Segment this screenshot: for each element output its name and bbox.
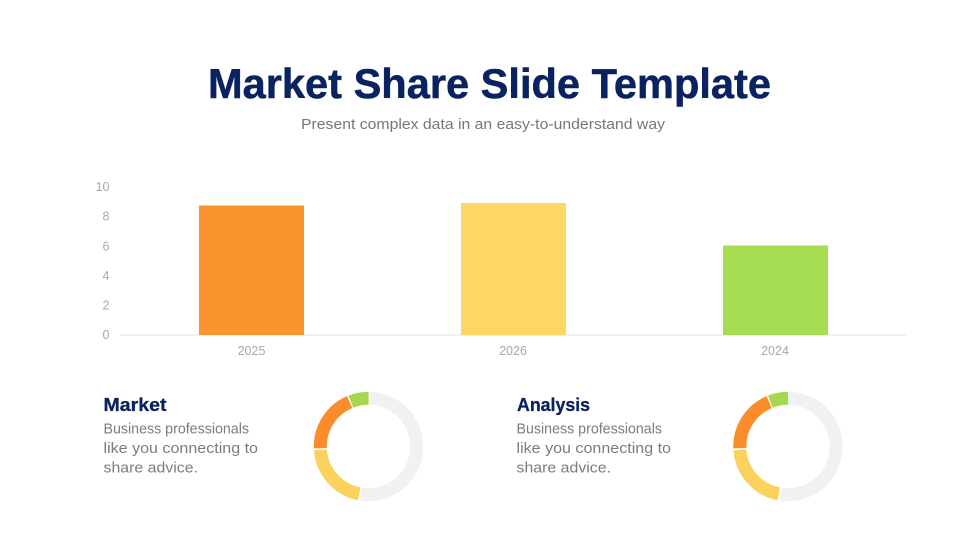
y axis labels: 8 xyxy=(103,210,110,224)
bar: 2024 xyxy=(723,246,828,335)
title: Market Share Slide Template xyxy=(208,60,771,107)
x axis labels: 2025 xyxy=(238,344,265,358)
panel: analysis xyxy=(516,384,851,509)
donut chart: market xyxy=(306,384,431,509)
bar chart xyxy=(96,180,906,358)
y axis labels xyxy=(96,180,110,342)
text block: market: Business professionals xyxy=(104,420,249,438)
x axis labels xyxy=(238,344,789,358)
donut chart: analysis xyxy=(725,384,851,509)
y axis labels: 6 xyxy=(103,240,110,254)
bar: 2026 xyxy=(461,203,566,335)
y axis labels: 2 xyxy=(103,298,110,312)
heading: market: Market xyxy=(104,395,166,415)
y axis labels: 10 xyxy=(96,180,110,194)
bar: 2025 xyxy=(199,206,304,335)
text block: analysis xyxy=(516,420,671,476)
y axis labels: 4 xyxy=(103,269,110,283)
panel: market xyxy=(104,384,431,509)
text block: analysis: share advice. xyxy=(516,460,611,476)
text block: market xyxy=(104,420,258,476)
text block: market: like you connecting to xyxy=(104,440,258,457)
text block: market: share advice. xyxy=(104,460,198,476)
x axis labels: 2024 xyxy=(761,344,789,358)
text block: analysis: Business professionals xyxy=(516,420,662,438)
y axis labels: 0 xyxy=(103,328,110,342)
heading: analysis: Analysis xyxy=(517,395,590,415)
subtitle: Present complex data in an easy-to-understand way xyxy=(301,116,666,133)
text block: analysis: like you connecting to xyxy=(516,440,671,457)
x axis labels: 2026 xyxy=(499,344,527,358)
